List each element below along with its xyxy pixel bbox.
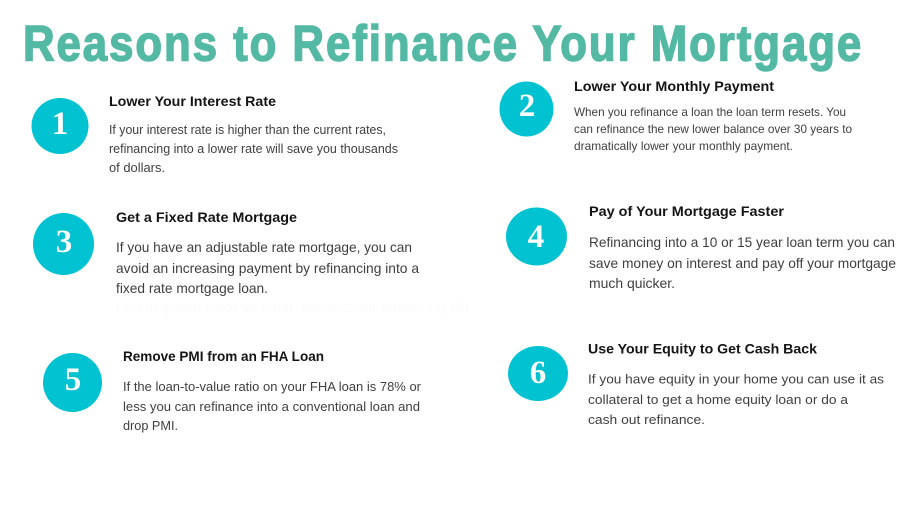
text block: reason 5 xyxy=(123,379,422,433)
icon: number 3: 3 xyxy=(56,224,72,260)
text block: reason 6 xyxy=(588,372,885,427)
text block: reason 3: If you have an adjustable rate mortgage, you can xyxy=(116,239,412,255)
text block: reason 4: Refinancing into a 10 or 15 year loan term you can xyxy=(589,234,895,250)
text block: reason 6: cash out refinance. xyxy=(588,412,705,427)
text block: reason 3: avoid an increasing payment by refinancing into a xyxy=(116,260,419,276)
heading: reason 5: Remove PMI from an FHA Loan xyxy=(123,348,324,364)
text block: reason 1: of dollars. xyxy=(109,160,165,175)
panel: reason 4 xyxy=(506,203,896,291)
panel: reason 1 xyxy=(32,93,398,175)
text block: faint ghost line: Lorem ipsum dolor sit amet, consectetur adipiscing elit xyxy=(116,299,469,315)
title: Reasons to Refinance Your Mortgage xyxy=(23,15,861,71)
text block: reason 5: less you can refinance into a conventional loan and xyxy=(123,399,420,414)
icon: number 1 xyxy=(32,98,88,154)
text block: reason 4 xyxy=(589,234,896,291)
icon: number 2 xyxy=(500,82,554,136)
text block: reason 2: When you refinance a loan the loan term resets. You xyxy=(574,105,846,119)
text block: reason 1 xyxy=(109,122,398,175)
icon: number 4: 4 xyxy=(528,219,544,255)
panel: reason 3 xyxy=(33,209,469,315)
heading: reason 4: Pay of Your Mortgage Faster xyxy=(589,203,785,219)
panel: reason 2 xyxy=(500,78,852,153)
text block: reason 4: save money on interest and pay off your mortgage xyxy=(589,255,896,271)
text block: reason 3: fixed rate mortgage loan. xyxy=(116,280,268,296)
text block: reason 2: dramatically lower your monthly payment. xyxy=(574,139,793,153)
heading: reason 2: Lower Your Monthly Payment xyxy=(574,78,774,94)
icon: number 2: 2 xyxy=(519,88,535,124)
panel: reason 6 xyxy=(508,340,885,427)
heading: reason 6: Use Your Equity to Get Cash Back xyxy=(588,340,817,356)
text block: reason 1: If your interest rate is higher than the current rates, xyxy=(109,122,386,137)
icon: number 6: 6 xyxy=(530,355,546,391)
text block: reason 5: drop PMI. xyxy=(123,418,178,433)
icon: number 6 xyxy=(508,346,568,401)
icon: number 3 xyxy=(33,213,94,275)
text block: reason 4: much quicker. xyxy=(589,275,675,291)
icon: number 4 xyxy=(506,208,567,266)
icon: number 5: 5 xyxy=(65,362,81,398)
text block: reason 2: can refinance the new lower balance over 30 years to xyxy=(574,122,852,136)
heading: reason 1: Lower Your Interest Rate xyxy=(109,93,276,109)
text block: reason 1: refinancing into a lower rate will save you thousands xyxy=(109,141,398,156)
text block: reason 5: If the loan-to-value ratio on your FHA loan is 78% or xyxy=(123,379,422,394)
text block: reason 6: collateral to get a home equity loan or do a xyxy=(588,392,849,407)
icon: number 5 xyxy=(43,353,102,412)
icon: number 1: 1 xyxy=(52,106,68,142)
panel: reason 5 xyxy=(43,348,422,433)
text block: reason 3 xyxy=(116,239,419,296)
heading: reason 3: Get a Fixed Rate Mortgage xyxy=(116,209,297,225)
text block: reason 2 xyxy=(574,105,852,153)
text block: reason 6: If you have equity in your home you can use it as xyxy=(588,372,885,386)
